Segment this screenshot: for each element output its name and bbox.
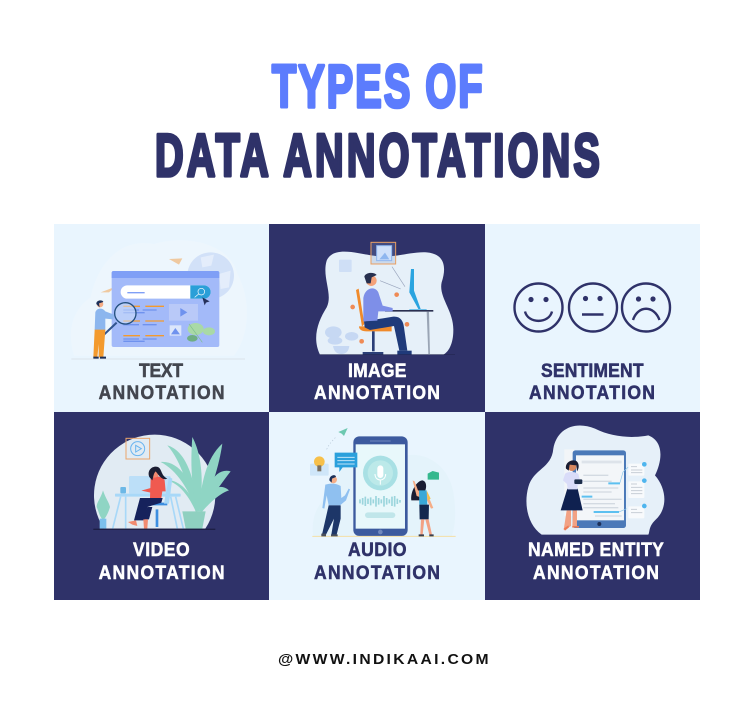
- label: AUDIO: [348, 538, 407, 560]
- panel: sentiment annotation: [485, 224, 700, 412]
- footer website: @WWW.INDIKAAI.COM: [278, 652, 489, 668]
- label: ANNOTATION: [533, 561, 659, 583]
- icon: neutral face: [569, 284, 617, 332]
- label: ANNOTATION: [99, 561, 225, 583]
- label: [529, 359, 655, 403]
- panel: image annotation: [269, 224, 485, 412]
- illustration: phone with microphone: [310, 428, 456, 536]
- label: ANNOTATION: [529, 381, 655, 403]
- icon: sad face: [622, 284, 670, 332]
- label: [528, 538, 664, 583]
- label: VIDEO: [133, 538, 190, 560]
- title: [155, 53, 600, 189]
- title line 2: DATA ANNOTATIONS: [155, 122, 600, 189]
- icon: happy face: [514, 284, 562, 332]
- label: ANNOTATION: [314, 381, 440, 403]
- illustration: person at desk: [316, 242, 455, 355]
- illustration: woman with tablet: [526, 425, 664, 535]
- label: TEXT: [139, 359, 184, 381]
- label: [314, 538, 440, 583]
- label: ANNOTATION: [99, 381, 225, 403]
- panel: video annotation: [54, 412, 269, 600]
- title line 1: TYPES OF: [272, 53, 483, 120]
- label: [99, 359, 225, 403]
- panel: text annotation: [54, 224, 269, 412]
- label: [314, 359, 440, 403]
- panel: named entity annotation: [485, 412, 700, 600]
- illustration: web page search: [71, 240, 247, 359]
- label: ANNOTATION: [314, 561, 440, 583]
- label: [99, 538, 225, 583]
- illustration: woman at desk with plant: [93, 435, 231, 529]
- label: IMAGE: [348, 359, 407, 381]
- label: NAMED ENTITY: [528, 538, 664, 560]
- panel: audio annotation: [269, 412, 485, 600]
- label: SENTIMENT: [541, 359, 644, 381]
